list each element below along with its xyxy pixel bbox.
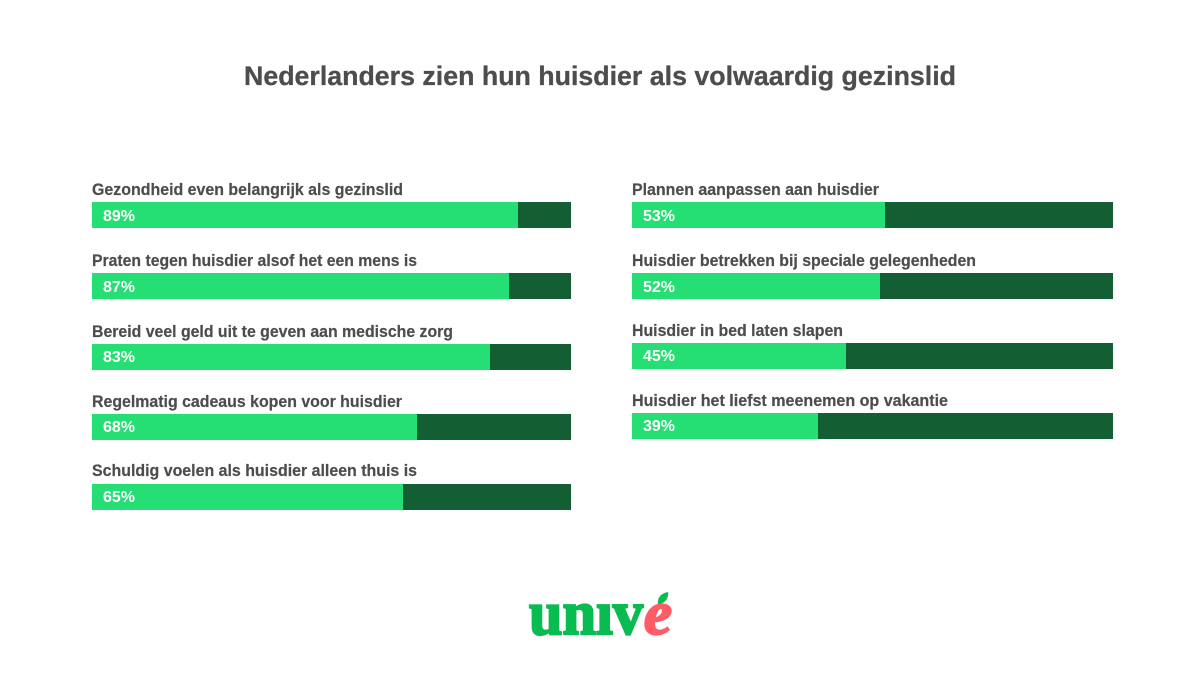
bar: gezondheid 89%: Gezondheid even belangrijk als gezinslid — [92, 181, 403, 199]
bar: in bed 45%: Huisdier in bed laten slapen — [632, 322, 843, 340]
bar: in bed 45% — [632, 322, 1113, 369]
logo: univé: e — [644, 580, 672, 648]
bar: vakantie 39%: Huisdier het liefst meenemen op vakantie — [632, 392, 948, 410]
panel: right column — [632, 181, 1113, 439]
bar: plannen 53% — [632, 181, 1113, 228]
bar: cadeaus 68%: Regelmatig cadeaus kopen voor huisdier — [92, 393, 403, 411]
bar: plannen 53%: 53% — [643, 208, 675, 225]
bar: praten 87%: 87% — [103, 279, 135, 296]
panel: left column — [92, 181, 571, 510]
bar: schuldig 65%: Schuldig voelen als huisdier alleen thuis is — [92, 462, 417, 480]
bar: schuldig 65% — [92, 462, 571, 510]
icon: leaf accent — [658, 592, 668, 604]
logo: univé: unıv — [529, 580, 643, 648]
bar: speciale gelegenheden 52% — [632, 252, 1113, 299]
bar: medische zorg 83%: Bereid veel geld uit te geven aan medische zorg — [92, 323, 453, 341]
bar: schuldig 65%: 65% — [103, 489, 135, 506]
bar: speciale gelegenheden 52%: 52% — [643, 279, 675, 296]
bar: gezondheid 89%: 89% — [103, 208, 135, 225]
bar: plannen 53%: Plannen aanpassen aan huisdier — [632, 181, 880, 199]
bar: speciale gelegenheden 52%: Huisdier betrekken bij speciale gelegenheden — [632, 252, 976, 270]
bar: cadeaus 68%: 68% — [103, 419, 135, 436]
bar: gezondheid 89% — [92, 181, 571, 228]
title: Nederlanders zien hun huisdier als volwaardig gezinslid — [244, 61, 956, 91]
bar: cadeaus 68% — [92, 393, 571, 440]
bar: medische zorg 83% — [92, 323, 571, 370]
bar: vakantie 39%: 39% — [643, 418, 675, 435]
bar: vakantie 39% — [632, 392, 1113, 439]
bar: praten 87%: Praten tegen huisdier alsof het een mens is — [92, 252, 417, 270]
bar: medische zorg 83%: 83% — [103, 349, 135, 366]
bar: in bed 45%: 45% — [643, 348, 675, 365]
bar: praten 87% — [92, 252, 571, 299]
